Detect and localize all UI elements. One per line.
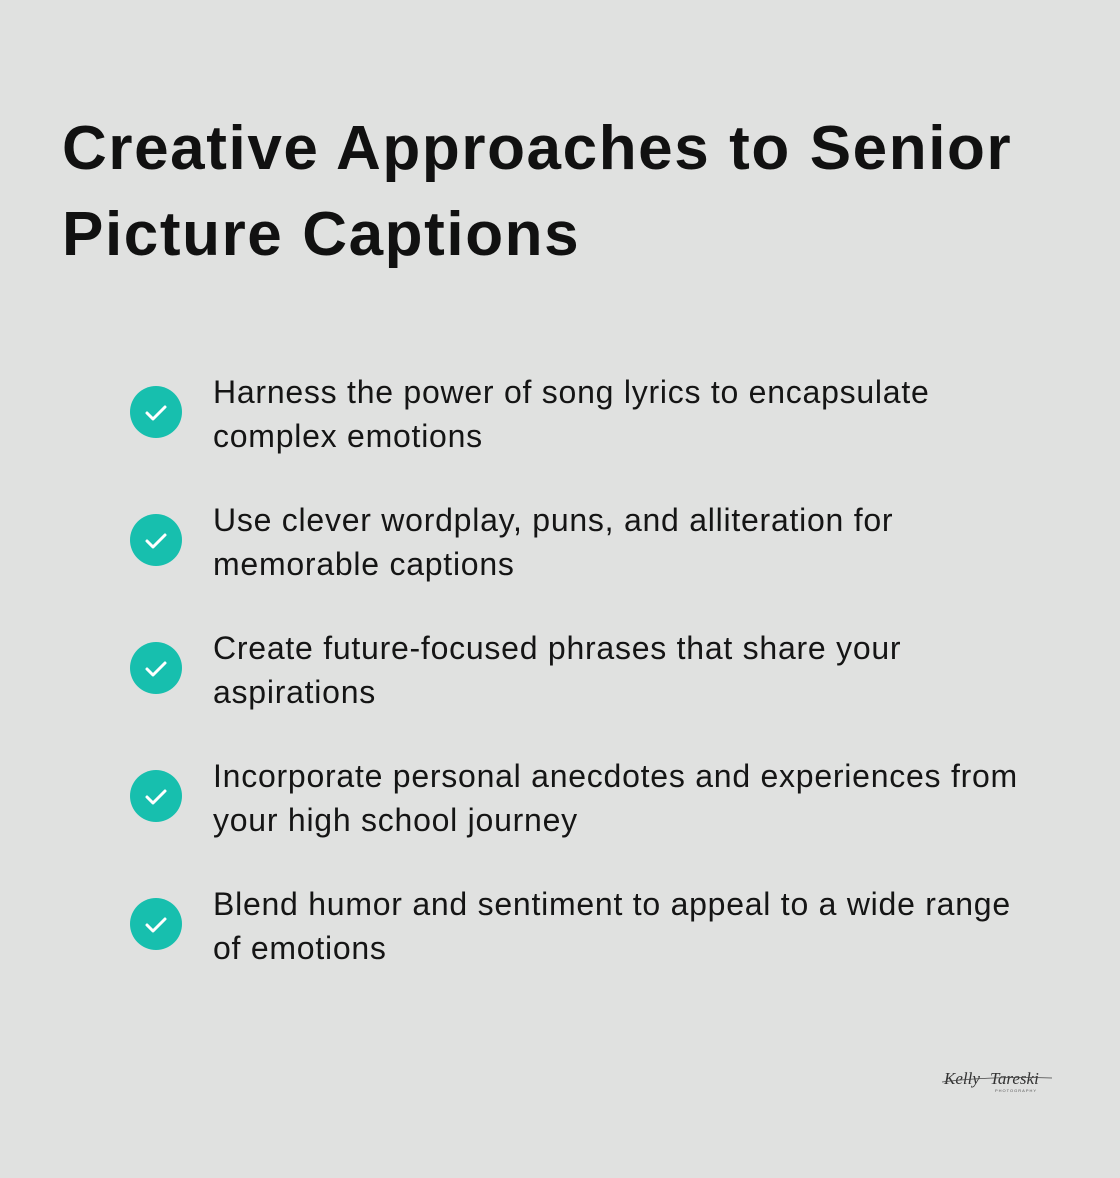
title: Creative Approaches to Senior bbox=[62, 114, 1012, 183]
text bbox=[213, 630, 901, 710]
icon: check bbox=[130, 898, 182, 950]
logo signature bbox=[942, 1069, 1052, 1093]
title: Picture Captions bbox=[62, 200, 580, 269]
text: Blend humor and sentiment to appeal to a wide range bbox=[213, 886, 1011, 922]
text: Create future-focused phrases that share your bbox=[213, 630, 901, 666]
text: your high school journey bbox=[213, 802, 578, 838]
text bbox=[213, 758, 1018, 838]
item 5 bbox=[130, 886, 1011, 966]
title bbox=[62, 114, 1012, 269]
icon: check bbox=[130, 514, 182, 566]
icon: check bbox=[130, 386, 182, 438]
text: aspirations bbox=[213, 674, 376, 710]
text bbox=[213, 502, 893, 582]
text: Incorporate personal anecdotes and experiences from bbox=[213, 758, 1018, 794]
text: Use clever wordplay, puns, and alliteration for bbox=[213, 502, 893, 538]
text: of emotions bbox=[213, 930, 387, 966]
item 1 bbox=[130, 374, 930, 454]
text: Harness the power of song lyrics to encapsulate bbox=[213, 374, 930, 410]
text: memorable captions bbox=[213, 546, 515, 582]
logo signature: Kelly bbox=[943, 1069, 980, 1088]
logo signature: Tareski bbox=[990, 1069, 1039, 1088]
item 3 bbox=[130, 630, 901, 710]
logo signature: PHOTOGRAPHY bbox=[995, 1088, 1037, 1093]
icon: check bbox=[130, 770, 182, 822]
text bbox=[213, 374, 930, 454]
item 2 bbox=[130, 502, 893, 582]
icon: check bbox=[130, 642, 182, 694]
text bbox=[213, 886, 1011, 966]
text: complex emotions bbox=[213, 418, 483, 454]
item 4 bbox=[130, 758, 1018, 838]
